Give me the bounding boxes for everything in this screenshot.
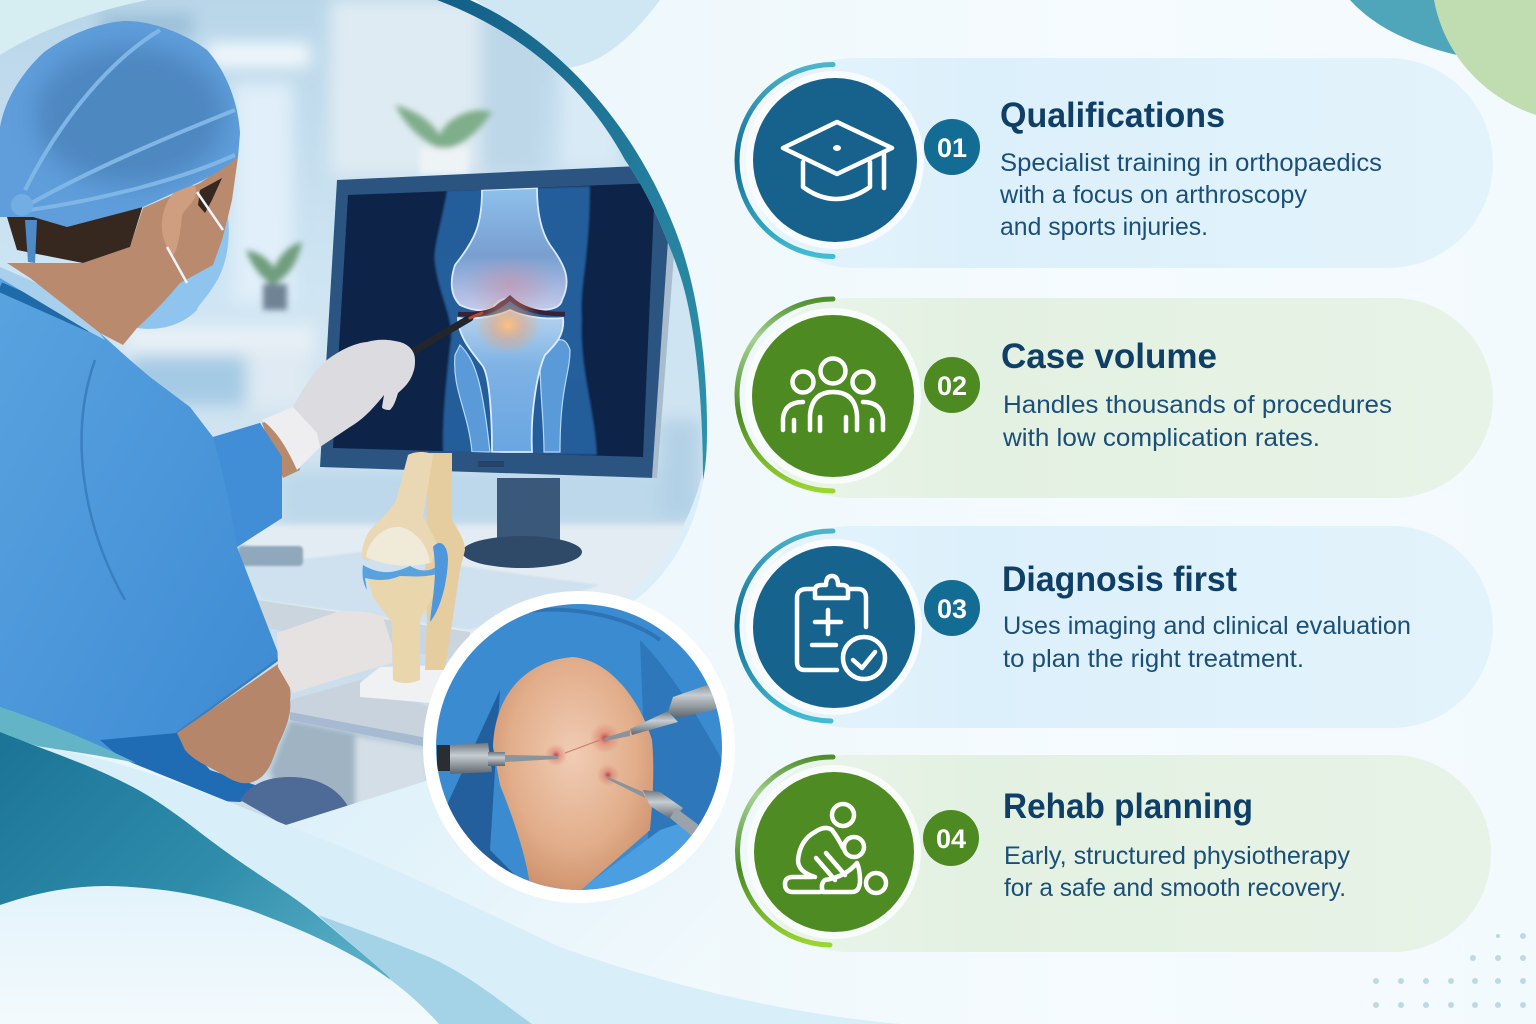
decorative crescent under photo [600,460,706,610]
tibia bone [367,573,438,683]
blurred plants [246,105,492,310]
panel: 01 qualifications [737,58,1493,268]
doctor: surgical cap [0,21,240,263]
pill background [750,755,1491,952]
light blue stripe [318,915,532,1024]
pale teal strip [0,707,136,763]
incision sites [545,723,620,786]
blue ligament [430,543,448,622]
number badge 01: 01 [937,133,967,163]
monitor screen [333,183,655,457]
pointer [411,312,484,355]
x-ray femur [452,188,567,310]
blurred clinic background [0,0,720,830]
monitor [320,165,674,568]
panel: 04 rehab planning [738,755,1491,952]
description: with a focus on arthroscopy [999,181,1307,209]
x-ray fibula [540,340,570,452]
x-ray pain glow [476,297,540,353]
pill background [750,298,1493,498]
description: Handles thousands of procedures [1003,391,1392,419]
panel: 02 case volume [737,298,1493,498]
doctor: surgical mask [137,192,229,329]
icon: graduation cap [746,71,924,249]
femur bone [362,452,437,563]
doctor: neck and face [7,157,238,345]
corner blob: top left [0,0,147,55]
left instrument [437,743,558,774]
doctor: scrubs [0,267,282,802]
number badge 04 [923,810,979,866]
doctor: upper forearm, cuff and glove [262,340,415,478]
doctor: forearm and lower glove [177,611,392,827]
panel: 03 diagnosis first [737,526,1493,728]
rear bone [425,453,465,670]
accent arc [737,299,833,491]
description: to plan the right treatment. [1003,645,1304,673]
pill background [750,58,1493,268]
icon: physiotherapy [747,765,921,939]
heading: Diagnosis first [1002,560,1237,599]
heading: Case volume [1001,337,1217,376]
number badge 02 [924,357,980,413]
blue surgical drape [430,600,730,900]
description: for a safe and smooth recovery. [1004,874,1346,902]
x-ray tibia [458,310,563,452]
white blob [0,886,439,1024]
description: and sports injuries. [1000,213,1208,241]
teal blob [0,732,400,1000]
number badge 03: 03 [937,594,967,624]
number badge 01 [924,119,980,175]
joint space [458,298,565,314]
pill background [750,526,1493,728]
description: Uses imaging and clinical evaluation [1003,612,1411,640]
upper right instrument [604,684,717,741]
description: Early, structured physiotherapy [1004,842,1351,870]
number badge 03 [924,580,980,636]
icon: clipboard with check [746,539,922,715]
desk and keyboard [238,525,700,825]
bone model [360,452,470,703]
inset: arthroscopic knee surgery [423,591,735,903]
corner blob: top right green [1434,0,1536,115]
teal arc framing the photo [437,0,707,480]
light wave behind inset [286,600,720,1024]
heading: Qualifications [1000,96,1225,135]
model base [360,666,446,703]
accent arc [737,64,833,256]
corner blob: top right teal [1350,0,1536,70]
icon: group of people [745,308,921,484]
decorative dot grid [1373,933,1526,1008]
pale wave [37,746,900,1024]
blue meniscus [362,565,438,590]
heading: Rehab planning [1003,787,1253,826]
lower right instrument [606,776,700,836]
description: with low complication rates. [1002,424,1320,452]
bottom waves [0,600,900,1024]
corner blob: top centre [475,0,660,68]
number badge 02: 02 [937,371,967,401]
photo: doctor reviewing knee x-ray [0,0,720,830]
accent arc [737,531,833,721]
x-ray soft tissue [434,186,597,455]
accent arc [738,757,833,945]
number badge 04: 04 [936,824,966,854]
description: Specialist training in orthopaedics [1000,149,1382,177]
knee skin [493,657,653,891]
